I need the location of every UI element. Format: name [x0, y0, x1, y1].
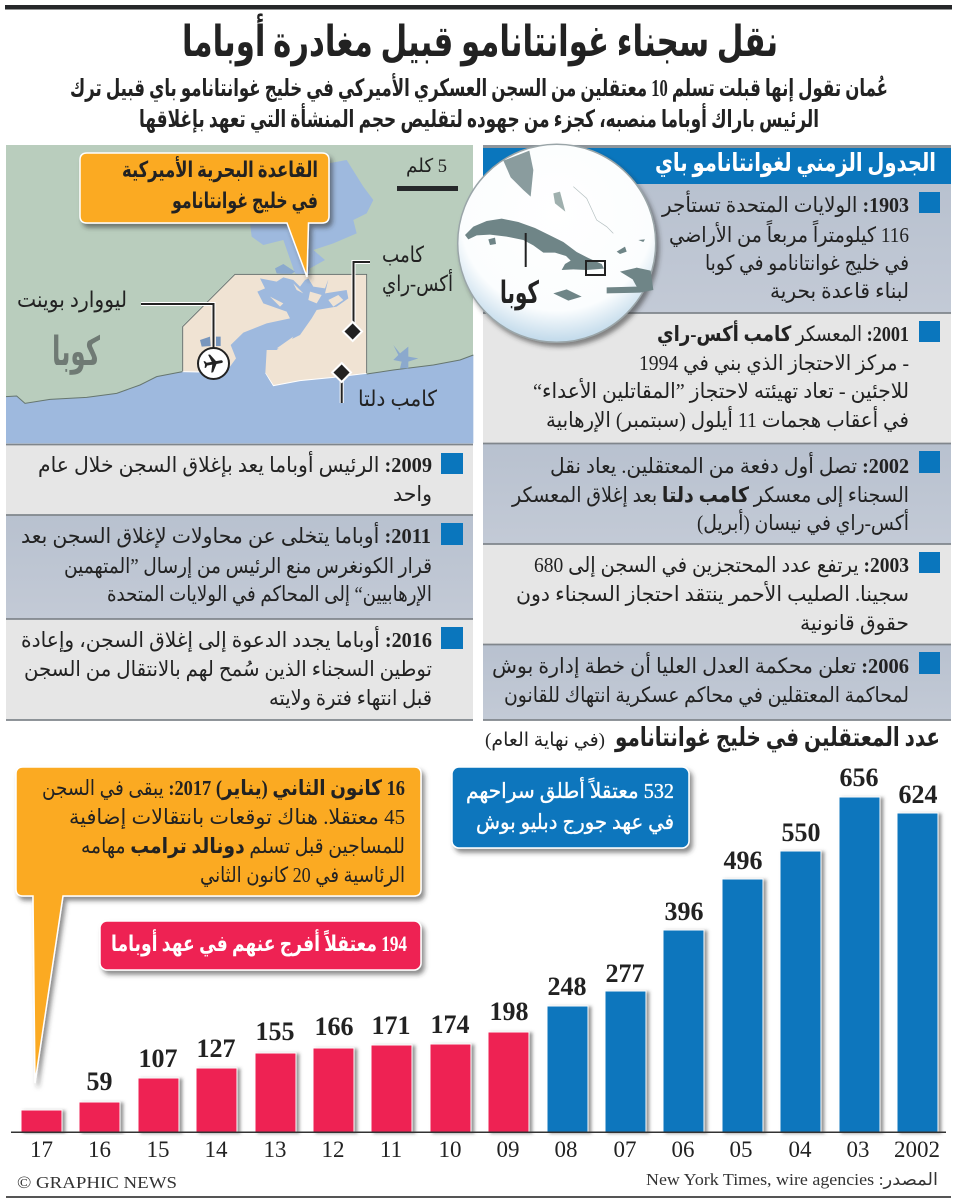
bar: 2007: 07 — [614, 1137, 636, 1162]
panel: 2016 — [6, 620, 473, 720]
bar: 2006: 06 — [672, 1137, 694, 1162]
bar: 2009: 09 — [496, 1137, 520, 1162]
bar: 2007 — [605, 959, 646, 1162]
bar: 2013 — [255, 1017, 296, 1162]
scale bar — [397, 156, 458, 191]
scale bar: 5 كلم — [406, 156, 447, 177]
row dividers, right — [483, 313, 951, 720]
callout: 532 released under Bush: 532 معتقلاً أطلق سراحهم — [466, 777, 674, 804]
callout: 532 released under Bush: في عهد جورج دبليو بوش — [476, 810, 674, 835]
callout: January 2017 — [16, 767, 421, 1083]
locator globe — [458, 144, 656, 342]
bar: 2017: 17 — [30, 1137, 53, 1162]
label: Camp Delta: كامب دلتا — [358, 386, 437, 411]
callout: 532 released under Bush — [452, 767, 689, 848]
bar: 2016: 16 — [88, 1137, 111, 1162]
bar: 2017 — [21, 1110, 62, 1162]
timeline entry: 2001 — [483, 313, 951, 443]
bar: 2005 — [722, 846, 763, 1162]
bar chart — [11, 763, 946, 1162]
label: Camp X-Ray: أكس-راي — [382, 269, 453, 297]
panel: 2011: 2011: أوباما يتخلى عن محاولات لإغلاق السجن بعد — [21, 522, 431, 548]
bar: 2007: 277 — [606, 959, 644, 988]
timeline entry: 2003: 2003: يرتفع عدد المحتجزين في السجن إلى 680 — [534, 553, 909, 578]
bar: 2013: 13 — [264, 1137, 286, 1162]
bar: 2008: 248 — [548, 972, 586, 1001]
callout: US naval base: القاعدة البحرية الأميركية — [122, 155, 318, 183]
globe disc — [458, 144, 656, 342]
naval base territory — [183, 274, 367, 386]
bar: 2003: 03 — [846, 1137, 870, 1162]
bar: 2006 — [663, 897, 704, 1162]
timeline entry: 2002 — [483, 444, 951, 544]
label: Cuba on globe: كوبا — [500, 275, 540, 311]
bar: 2013: 155 — [256, 1017, 294, 1046]
panel: location map — [6, 145, 473, 443]
bar: 2014: 14 — [204, 1137, 228, 1162]
map land — [6, 145, 473, 443]
bar: 2015: 15 — [146, 1137, 170, 1162]
bar: 2016 — [79, 1067, 120, 1162]
timeline entry: 1903: في خليج غوانتانامو في كوبا — [705, 251, 909, 275]
timeline entry: 2003 — [483, 544, 951, 644]
globe land — [465, 151, 653, 301]
callout: January 2017: الرئاسية في 20 كانون الثاني — [200, 863, 405, 887]
timeline entry: 2002: السجناء إلى معسكر كامب دلتا بعد إغلاق المعسكر — [511, 483, 909, 508]
bar: 2006: 396 — [664, 897, 704, 926]
bottom rule — [6, 1196, 951, 1198]
bar: 2014: 127 — [196, 1034, 236, 1063]
row dividers, left — [6, 444, 473, 720]
locator box — [586, 261, 605, 275]
panel: 2009: واحد — [393, 482, 432, 506]
timeline entry: 1903 — [483, 184, 951, 313]
subtitle — [70, 73, 888, 133]
timeline entry: 1903: 1903: الولايات المتحدة تستأجر — [661, 190, 909, 217]
locator line — [525, 233, 527, 267]
callout: 194 released under Obama — [100, 921, 421, 970]
timeline entry: 2001: للاجئين - تعاد تهيئته لاحتجاز ”المقاتلين الأعداء“ — [533, 378, 909, 403]
timeline entry: 2002: 2002: تصل أول دفعة من المعتقلين. يعاد نقل — [550, 452, 909, 478]
bar: 2009 — [488, 997, 529, 1162]
map water and base — [6, 160, 473, 443]
bar: 2010 — [430, 1010, 471, 1162]
callout: January 2017: للمساجين قبل تسلم دونالد ترامب مهامه — [81, 834, 405, 859]
bar: 2014 — [196, 1034, 237, 1162]
credit: © GRAPHIC NEWS — [17, 1173, 177, 1192]
callout: US naval base — [80, 153, 329, 277]
timeline entry: 1903: 116 كيلومتراً مربعاً من الأراضي — [669, 219, 909, 247]
bar: 2003: 656 — [840, 763, 878, 792]
bar: 2015 — [138, 1044, 179, 1162]
bar: 2005: 05 — [730, 1137, 752, 1162]
top rule — [5, 5, 952, 10]
bar: 2005: 496 — [724, 846, 762, 875]
source: المصدر: New York Times, wire agencies — [646, 1170, 938, 1189]
bar: 2004: 550 — [782, 818, 820, 847]
timeline entry: 2003: حقوق قانونية — [800, 611, 909, 635]
bar: 2002: 624 — [898, 780, 938, 809]
label: Leeward Point with airport: ليووارد بوينت — [17, 287, 127, 312]
panel: 2016: توطين السجناء الذين سُمح لهم بالانتقال من السجن — [24, 657, 432, 682]
chart axis — [11, 1132, 946, 1133]
label: Camp X-Ray: كامب — [382, 242, 424, 267]
timeline entry: 2001: في أعقاب هجمات 11 أيلول (سبتمبر) الإرهابية — [546, 406, 909, 432]
bar: 2010: 174 — [430, 1010, 470, 1039]
label: Camp X-Ray — [343, 242, 453, 341]
bar: 2010: 10 — [438, 1137, 462, 1162]
bar: 2004 — [780, 818, 821, 1162]
bar: 2012: 12 — [322, 1137, 344, 1162]
bar: 2015: 107 — [138, 1044, 178, 1073]
panel: 2009: 2009: الرئيس أوباما يعد بإغلاق السجن خلال عام — [38, 451, 432, 478]
timeline entry: 2002: أكس-راي في نيسان (أبريل) — [697, 509, 909, 535]
chart heading — [485, 723, 940, 753]
timeline entry: 2003: سجينا. الصليب الأحمر ينتقد احتجاز السجناء دون — [516, 581, 909, 606]
bar: 2011 — [371, 1011, 412, 1162]
timeline entry: 2006 — [483, 644, 951, 720]
bar: 2012: 166 — [314, 1012, 354, 1041]
bar: 2011: 11 — [380, 1137, 402, 1162]
callout: 194 released under Obama: 194 معتقلاً أفرج عنهم في عهد أوباما — [111, 928, 407, 957]
bar: 2004: 04 — [788, 1137, 812, 1162]
callout: January 2017: 16 كانون الثاني (يناير) 2017: يبقى في السجن — [42, 776, 405, 800]
timeline entry: 1903: لبناء قاعدة بحرية — [770, 279, 909, 303]
bar: 2016: 59 — [86, 1067, 112, 1096]
bar: 2009: 198 — [490, 997, 528, 1026]
bar: 2003 — [839, 763, 880, 1162]
label: Leeward Point with airport — [17, 287, 229, 379]
callout: January 2017: 45 معتقلا. هناك توقعات بانتقالات إضافية — [69, 805, 405, 830]
bar: 2011: 171 — [372, 1011, 410, 1040]
bar: 2002: 2002 — [894, 1137, 940, 1162]
panel: 2011: قرار الكونغرس منع الرئيس من إرسال ”المتهمين — [64, 554, 432, 579]
timeline entry: 2006: 2006: تعلن محكمة العدل العليا أن خطة إدارة بوش — [492, 652, 909, 679]
label: Cuba: كوبا — [52, 329, 100, 375]
bar: 2008: 08 — [554, 1137, 578, 1162]
timeline entry: 2001: 2001: المعسكر كامب أكس-راي — [657, 319, 909, 347]
bar: 2012 — [313, 1012, 354, 1162]
panel: 2011: الإرهابيين“ إلى المحاكم في الولايات المتحدة — [107, 582, 432, 607]
timeline header — [483, 145, 951, 184]
label: Camp Delta — [332, 363, 437, 411]
bar: 2008 — [547, 972, 588, 1162]
panel: 2009 — [6, 445, 473, 515]
panel: 2016: قبل انتهاء فترة ولايته — [269, 686, 432, 710]
callout: US naval base: في خليج غوانتانامو — [171, 188, 318, 214]
timeline entry: 2001: - مركز الاحتجاز الذي بني في 1994 — [639, 351, 909, 375]
bar: 2002 — [894, 780, 940, 1162]
panel: 2011 — [6, 515, 473, 619]
panel: timeline — [483, 145, 951, 720]
chart heading: (في نهاية العام) — [485, 730, 605, 751]
panel: 2016: 2016: أوباما يجدد الدعوة إلى إغلاق السجن، وإعادة — [21, 626, 432, 653]
timeline entry: 2006: لمحاكمة المعتقلين في محاكم عسكرية انتهاك للقانون — [504, 683, 909, 708]
